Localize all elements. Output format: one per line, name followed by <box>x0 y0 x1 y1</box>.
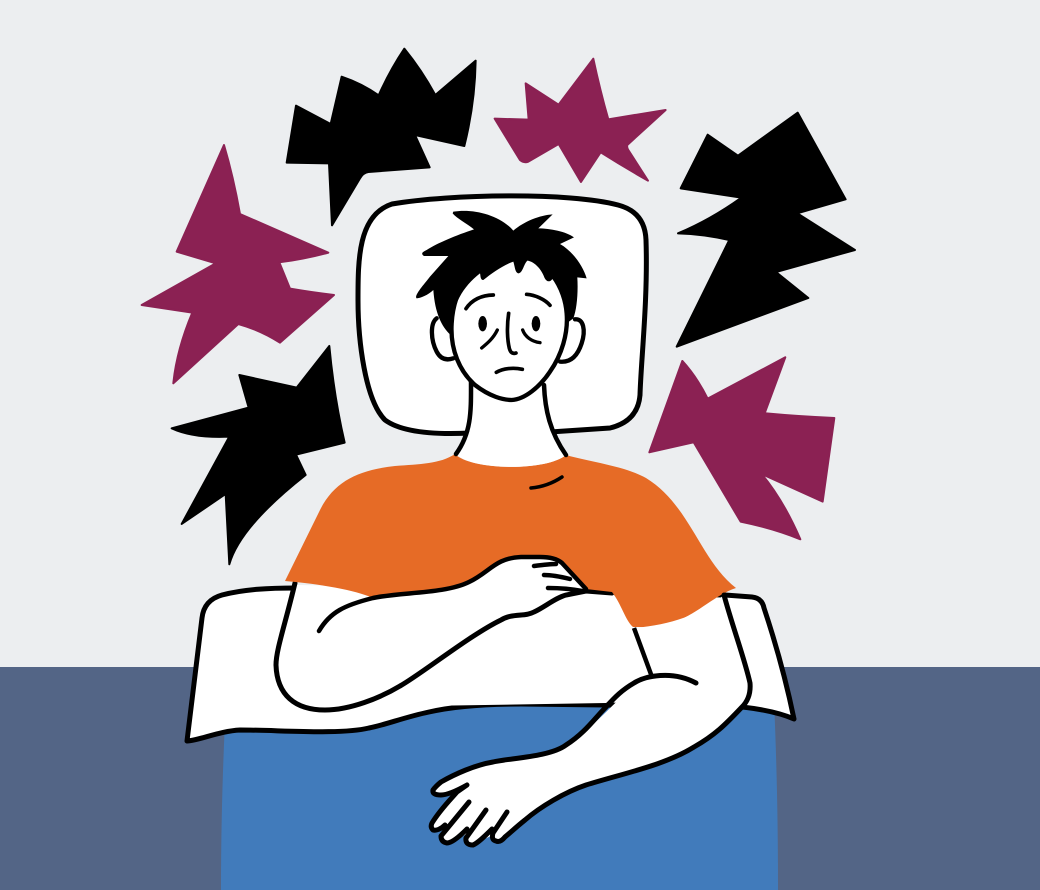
bed pillow <box>187 588 794 741</box>
group: stress bursts <box>142 49 855 564</box>
background wall <box>0 0 1040 667</box>
burst: right purple <box>649 357 834 539</box>
torso <box>296 585 652 710</box>
left arm folded <box>276 557 612 710</box>
blanket <box>221 700 778 890</box>
right ear <box>560 319 584 362</box>
eyebrows <box>466 294 550 309</box>
right arm fill <box>431 595 750 846</box>
head pillow <box>358 196 646 433</box>
mouth <box>496 368 522 372</box>
collar crease <box>531 477 562 488</box>
head <box>416 211 587 400</box>
forearm and hand lines <box>319 557 586 631</box>
neck lines <box>456 380 566 455</box>
torso right line <box>634 628 652 677</box>
eyes <box>478 316 487 331</box>
left arm outline <box>276 583 612 710</box>
floor band <box>0 667 1040 890</box>
face <box>451 253 567 400</box>
hair <box>416 211 587 335</box>
right eye <box>532 316 540 331</box>
burst: top left black <box>287 49 476 225</box>
right arm <box>431 595 750 846</box>
burst: left purple <box>142 145 334 383</box>
shirt <box>285 454 736 627</box>
right arm outline <box>431 595 750 845</box>
nose <box>507 313 516 353</box>
burst: bottom left black <box>172 346 345 564</box>
burst: right black <box>677 113 855 347</box>
neck <box>456 380 566 467</box>
burst: top purple <box>495 59 666 182</box>
left ear <box>432 318 453 359</box>
eye bags <box>482 330 540 348</box>
